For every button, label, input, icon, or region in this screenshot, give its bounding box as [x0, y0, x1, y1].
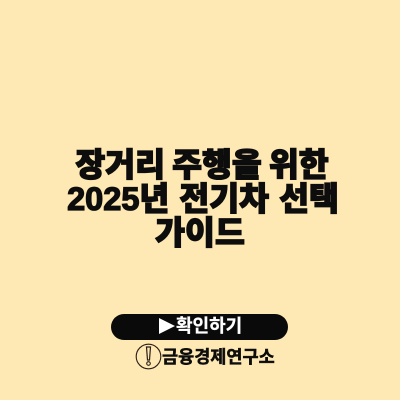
- icon: exclamation circle: [136, 344, 162, 370]
- title: 2025년 전기차 선택: [67, 181, 339, 217]
- title: [67, 147, 339, 251]
- button: confirm: [111, 314, 288, 340]
- button label: 확인하기: [176, 316, 242, 336]
- brand logo: [136, 344, 275, 370]
- brand name: 금융경제연구소: [162, 347, 275, 367]
- title: 가이드: [155, 215, 245, 251]
- title: 장거리 주행을 위한: [75, 147, 329, 183]
- icon: play triangle: [159, 318, 175, 334]
